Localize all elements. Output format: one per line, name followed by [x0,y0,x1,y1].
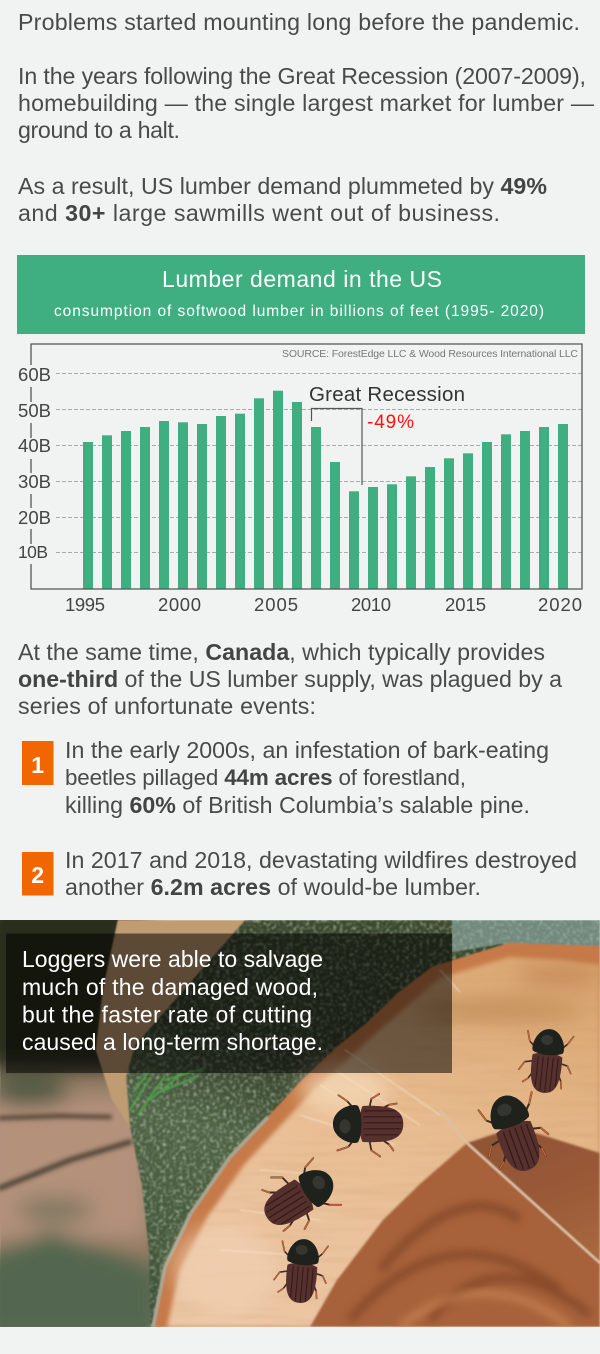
gridlines [56,374,582,552]
list item 2: In 2017 and 2018, devastating wildfires destroyed [65,847,577,873]
callout: Great Recession: -49% [367,412,414,433]
bars [83,391,568,589]
chart frame [31,344,582,589]
text block: intro: Problems started mounting long before the pandemic. [18,9,580,35]
bar chart [18,344,582,615]
text block: Canada [18,639,562,719]
text block: intro: In the years following the Great Recession (2007-2009), [18,63,586,89]
text block: Canada: series of unfortunate events: [18,693,316,719]
text block: intro: As a result, US lumber demand plummeted by 49% [18,173,547,199]
number badge 1 [22,741,54,785]
fallen branches [0,1116,130,1188]
bark with moss [126,920,600,1327]
orange sapwood rim [153,943,600,1327]
text block: intro: homebuilding — the single largest market for lumber — [18,90,595,116]
list item 1: killing 60% of British Columbia’s salable pine. [65,792,530,818]
y axis labels: 40B [18,435,51,456]
x axis labels: 2015 [445,594,486,615]
list item 2: another 6.2m acres of would-be lumber. [65,874,481,900]
bark edge highlight [153,1117,268,1327]
text block: intro: and 30+ large sawmills went out of business. [18,200,500,226]
wood grain [167,957,600,1327]
soft wood tones [175,965,600,1315]
caption overlay [6,934,452,1073]
callout: Great Recession: Great Recession [309,383,465,406]
number badge 2: 2 [31,862,44,888]
blurred forest floor [0,900,160,1340]
y axis labels: 20B [18,507,51,528]
x axis labels: 2000 [158,594,201,615]
heartwood [310,1133,600,1327]
list item 1: In the early 2000s, an infestation of bark-eating [65,737,549,763]
y axis labels: 60B [18,364,51,385]
y axis labels: 50B [18,400,51,421]
y axis labels: 10B [18,542,48,562]
text block: intro [18,9,595,226]
green needles [130,1068,205,1115]
beetles [250,1026,575,1305]
list item 1 [22,737,549,818]
log cut face [167,957,600,1327]
back log face [96,920,250,1127]
chart header [17,255,585,334]
callout: Great Recession [309,383,465,485]
x axis labels: 2020 [538,594,582,615]
text block: intro: ground to a halt. [18,117,180,143]
top right lichen [452,920,600,960]
number badge 1: 1 [31,752,44,778]
caption overlay: much of the damaged wood, [22,974,318,1000]
y axis labels [18,364,51,562]
text block: Canada: At the same time, Canada, which typically provides [18,639,545,665]
y axis labels: 30B [18,471,51,492]
source note: SOURCE: ForestEdge LLC & Wood Resources International LLC [282,348,578,360]
list item 1: beetles pillaged 44m acres of forestland, [65,765,466,790]
chart title: Lumber demand in the US [162,266,442,292]
x axis labels: 2010 [351,594,391,615]
chart subtitle: consumption of softwood lumber in billions of feet (1995- 2020) [54,303,544,320]
caption overlay: but the faster rate of cutting [22,1002,312,1028]
radial streaks [220,970,460,1255]
x axis labels: 1995 [65,594,105,615]
caption overlay: Loggers were able to salvage [22,946,323,972]
number badge 2 [22,852,54,896]
x axis labels: 2005 [254,594,298,615]
caption overlay: caused a long-term shortage. [22,1029,323,1055]
x axis labels [65,594,582,615]
list item 2 [22,847,577,900]
photo: cut log with bark beetles [0,900,600,1340]
text block: Canada: one-third of the US lumber supply, was plagued by a [18,666,562,692]
